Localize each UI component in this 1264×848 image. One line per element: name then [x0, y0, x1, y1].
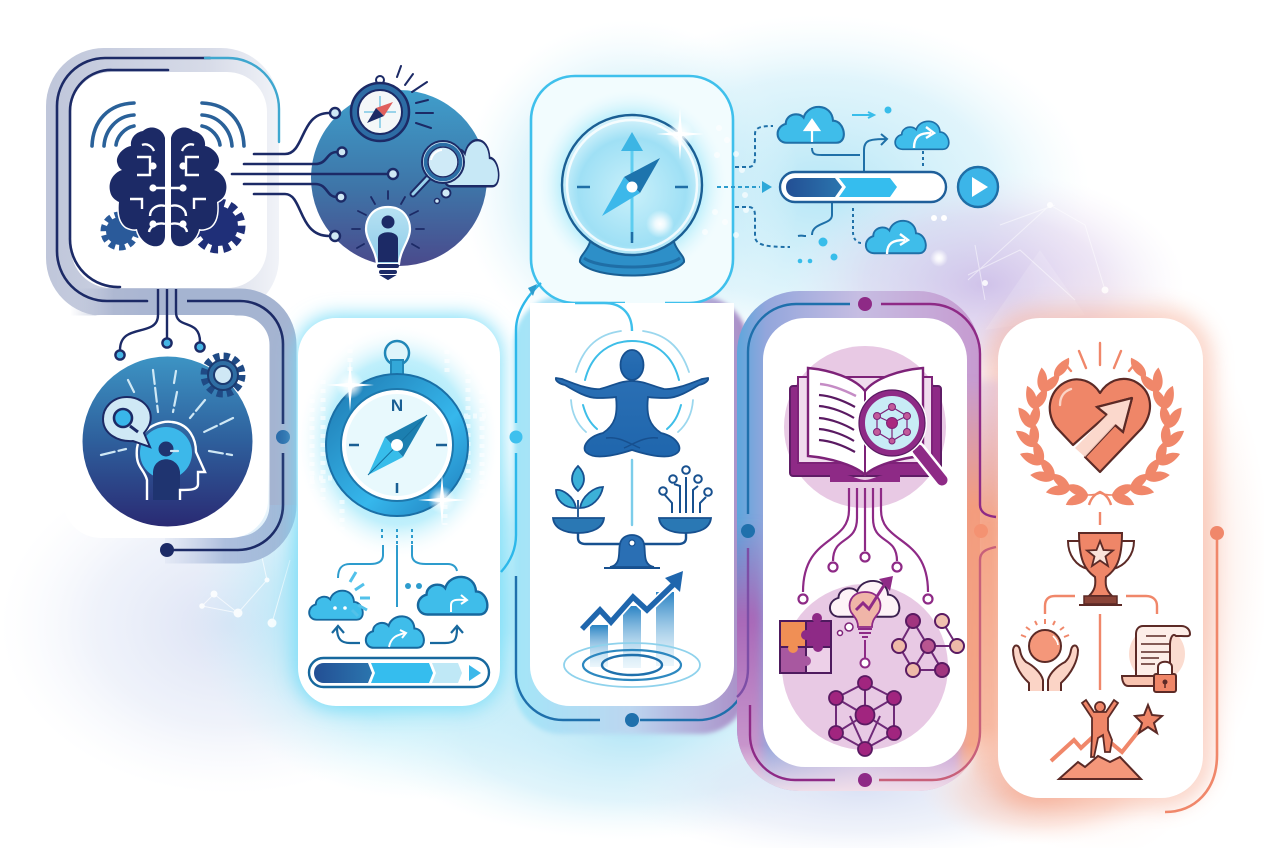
chart: growth bars and ripples: [564, 571, 700, 687]
connector: small node: [864, 640, 866, 660]
icon: meditating figure: [556, 350, 708, 457]
icon: laurel wreath: [1014, 356, 1186, 507]
sparkle: [656, 108, 704, 160]
connector dot: [160, 543, 174, 557]
icon: heart with arrow: [1050, 379, 1150, 472]
panel: crystal ball: [531, 76, 749, 304]
icon: open book: [790, 368, 941, 482]
connector: outer lines: [737, 304, 996, 780]
icon: trophy: [1068, 533, 1134, 605]
panel: achievement: [998, 318, 1224, 812]
connector: tree lines: [1045, 596, 1157, 690]
icon: play button: [958, 167, 998, 207]
connector: dashed flows: [717, 126, 923, 247]
panel: salmon strip between research and achievement: [972, 380, 1002, 790]
data dot texture: [310, 340, 490, 530]
icon: scale: [553, 518, 711, 568]
icon: light bulb with person: [352, 191, 424, 279]
node: [860, 658, 870, 668]
connector dot: [741, 524, 755, 538]
icon: aura arcs: [571, 331, 693, 432]
icon: head in circle: [82, 356, 252, 526]
connector: five branch lines: [798, 488, 932, 604]
divider line: [631, 460, 633, 525]
connector: small curve into figure: [575, 303, 632, 331]
connector: three circuit lines: [115, 289, 205, 360]
connector: outer navy path: [168, 301, 283, 550]
connector dots: [858, 297, 872, 311]
icon: small compass: [351, 66, 433, 141]
panel: inner self insight: [63, 289, 290, 557]
flow: clouds and progress bar: [717, 106, 998, 267]
panel outline: [531, 76, 733, 303]
icon: compass: [326, 341, 468, 516]
icon: ball base: [580, 242, 684, 276]
progress bar: [309, 658, 489, 687]
connector: left cyan path: [501, 283, 748, 720]
connector dot: [1210, 526, 1224, 540]
constellation accents: [200, 202, 1108, 627]
pink circles: [784, 346, 946, 508]
icon: gear: [204, 356, 242, 394]
pink circle lower: [782, 584, 948, 750]
icon: magnifier with network: [857, 388, 942, 480]
icon: compass: N: [391, 396, 403, 415]
arrow: [852, 112, 874, 118]
icon: signal arcs: [92, 103, 244, 146]
glow dot: [646, 210, 674, 238]
icon: node graph: [892, 614, 964, 677]
icon: clouds: [309, 572, 487, 648]
panel: research and knowledge: [737, 297, 996, 787]
sparkle: [418, 474, 466, 526]
icon: compass needle: [577, 132, 688, 243]
icon: bulb in cloud: [830, 576, 899, 637]
icon: magnifier and cloud: [413, 140, 499, 204]
panel: halo for balance panel: [514, 296, 748, 734]
icon: hands holding sun: [1013, 619, 1078, 691]
panel: halo for panel 2 connector top: [70, 302, 283, 505]
connector: right line: [1165, 533, 1217, 812]
arrow: small cyan marker: [528, 284, 537, 296]
connector: compass to clouds: [338, 529, 457, 607]
connector: circuit lines: [232, 113, 387, 236]
progress bar: [780, 172, 946, 202]
panel: halo for panel 2 connector bottom: [165, 505, 283, 550]
glow behind compass: [296, 324, 500, 560]
icon: scroll with lock: [1122, 626, 1190, 692]
panel: halo for research panel: [727, 291, 990, 800]
icon: plant: [556, 466, 603, 517]
panel: glow for achievement: [985, 308, 1213, 808]
icon: person on mountain with star: [1051, 700, 1162, 779]
panel: balance and growth: [501, 283, 748, 727]
icon: puzzle: [780, 613, 831, 673]
connector: [1099, 512, 1101, 525]
connector dot: [625, 713, 639, 727]
panel: compass and clouds: [296, 316, 501, 708]
connector dots: [510, 430, 522, 444]
white dots: [930, 215, 948, 267]
icon: brain: [110, 127, 226, 246]
arrow: [762, 181, 772, 193]
particle dots: [702, 125, 749, 238]
icon: circuit tree: [659, 466, 712, 513]
chart: circle with discovery icons: [232, 66, 499, 279]
connector: dots: [276, 430, 290, 444]
connector: navy border lines: [57, 58, 279, 301]
connector dot: [858, 773, 872, 787]
icon: upload cloud: [778, 107, 844, 143]
dots: [798, 106, 892, 263]
icon: cloud upper right: [895, 121, 949, 149]
icon: cloud lower: [866, 221, 926, 254]
icon: glass ball: [562, 115, 702, 255]
connector dot: [974, 524, 988, 538]
icon: gears: [104, 203, 241, 249]
panel: halo for panel 1: [46, 48, 279, 316]
panel: brain: [57, 58, 279, 301]
sparkles: [326, 359, 374, 411]
icon: molecule network: [829, 676, 901, 756]
icon: rays: [1066, 343, 1134, 371]
icon: speech bubble with magnifier: [103, 397, 151, 447]
